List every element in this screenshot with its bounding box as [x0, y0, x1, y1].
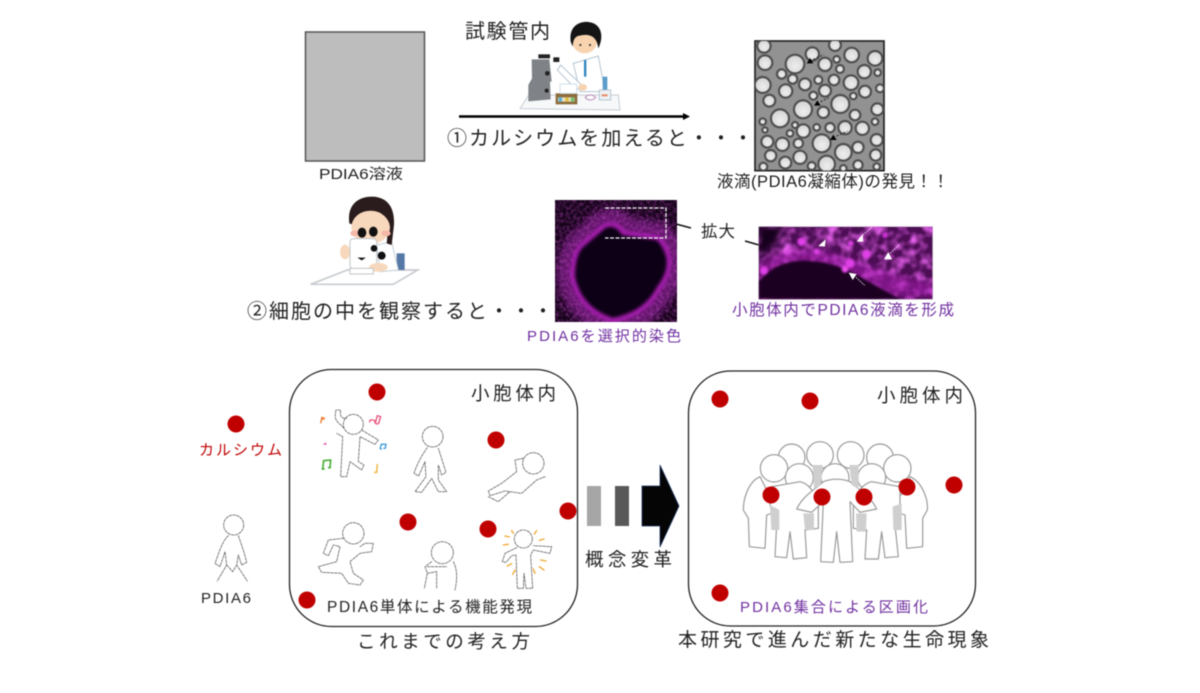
heading: in test tube: 試験管内: [465, 20, 550, 43]
panel: stained cell micrograph: [527, 200, 681, 345]
text: step 2: ②細胞の中を観察すると・・・: [247, 300, 553, 323]
icon: male scientist at bench: [520, 22, 620, 110]
figure: PDIA6 huddle: [743, 442, 927, 562]
label: paradigm shift: 概念変革: [585, 549, 672, 570]
legend: PDIA6 figure: PDIA6: [201, 590, 251, 607]
arrow: adding calcium: [459, 113, 690, 120]
selection: enlarged region: [605, 208, 666, 238]
calcium dots: new phenomenon: [712, 390, 962, 602]
label: selective staining: PDIA6を選択的染色: [527, 328, 681, 345]
figures: individual PDIA6: [318, 410, 552, 590]
label: in ER: 小胞体内: [471, 383, 556, 404]
panel: droplet micrograph: [755, 39, 884, 172]
figure: shocked: [502, 530, 552, 588]
caption: new phenomenon: 本研究で進んだ新たな生命現象: [678, 629, 989, 651]
figure: walking: [414, 426, 447, 492]
arrows: droplet markers: [807, 55, 847, 140]
arrow: paradigm shift: [585, 465, 679, 570]
arrows: condensate markers: [818, 227, 900, 285]
label: enlargement with leader lines: 拡大: [701, 222, 735, 241]
legend: PDIA6 figure: [201, 515, 251, 607]
panel: new phenomenon: [688, 371, 976, 626]
text: droplet discovery: 液滴(PDIA6凝縮体)の発見！！: [717, 172, 949, 191]
figure: music notes: [320, 416, 386, 472]
figure: running: [318, 523, 373, 585]
calcium dots: conventional view: [298, 384, 576, 608]
label: enlargement with leader lines: [676, 222, 759, 245]
shading: gaps between bodies: [770, 465, 902, 532]
label: compartmentalization: PDIA6集合による区画化: [740, 599, 928, 616]
figure: lying: [488, 453, 545, 502]
caption: conventional view: これまでの考え方: [357, 631, 530, 652]
figure: dancing: [335, 410, 378, 477]
label: function by monomer: PDIA6単体による機能発現: [327, 598, 532, 616]
icon: female scientist at microscope: [311, 197, 418, 284]
label: PDIA6 solution: PDIA6溶液: [319, 166, 404, 183]
panel: enlarged micrograph: [759, 227, 933, 299]
figure: sitting: [424, 542, 457, 590]
icon: standing figure: [215, 515, 247, 581]
panel: PDIA6 solution: [306, 32, 424, 183]
label: in ER: 小胞体内: [877, 385, 963, 406]
text: step 1: ①カルシウムを加えると・・・: [447, 127, 753, 150]
figure: shock marks: [503, 531, 546, 574]
image: grey solution square: [306, 32, 424, 161]
text: droplets form in ER: 小胞体内でPDIA6液滴を形成: [732, 301, 954, 319]
panel: conventional view: [290, 370, 578, 626]
legend: calcium: カルシウム: [199, 442, 282, 459]
legend: calcium: [199, 416, 282, 459]
